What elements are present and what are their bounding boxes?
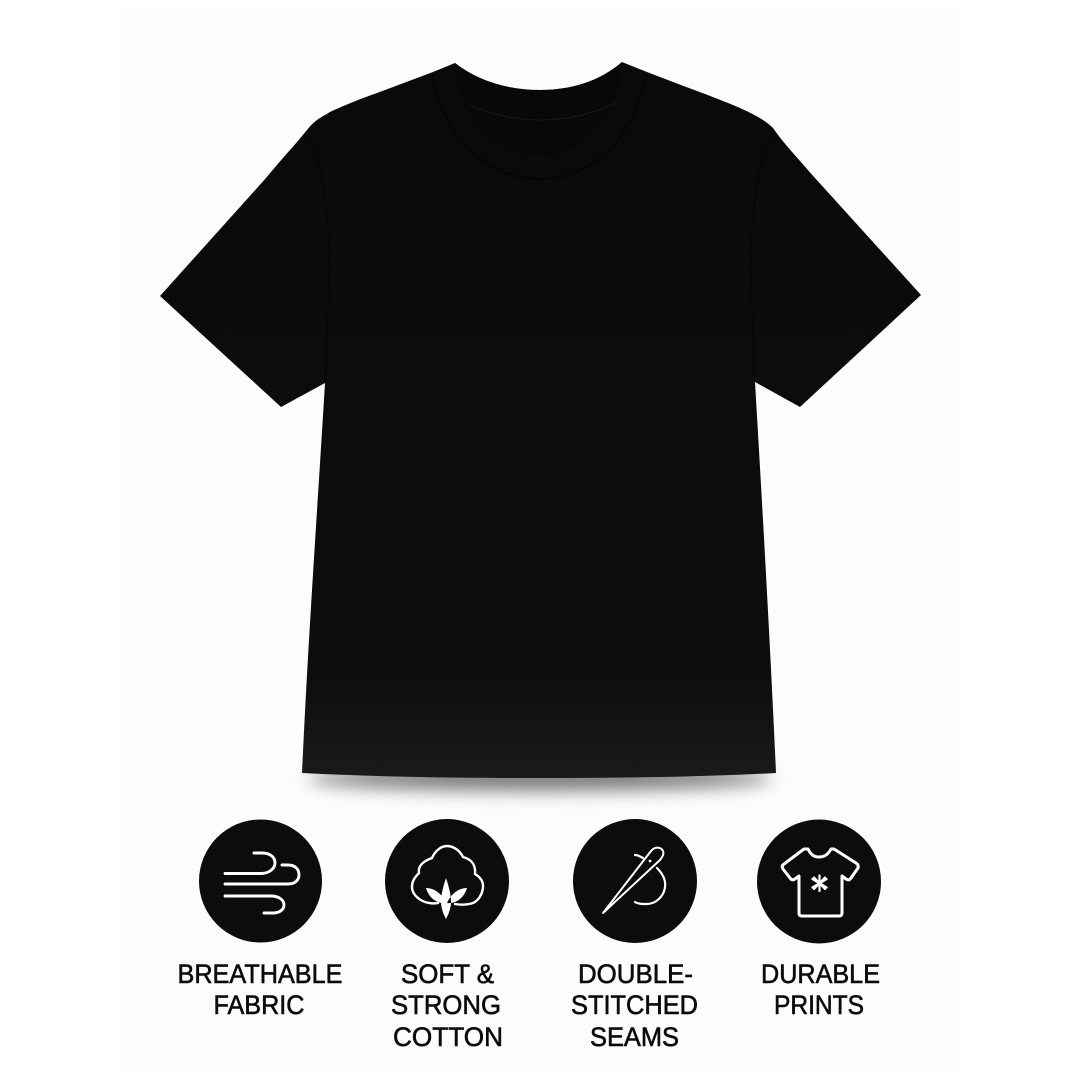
hem shadow — [308, 766, 772, 790]
neck interior — [455, 62, 622, 156]
panel: background — [120, 10, 960, 1070]
icon: wind — [199, 820, 322, 942]
label line 2: STITCHED — [571, 990, 698, 1020]
feature: double-stitched seams — [571, 819, 698, 1052]
collar rib — [433, 73, 645, 179]
label line 3: SEAMS — [590, 1022, 679, 1052]
icon: needle and thread — [573, 819, 697, 943]
label line 2: PRINTS — [774, 990, 864, 1020]
label: DURABLE — [761, 959, 880, 989]
feature: breathable fabric — [178, 820, 342, 1020]
shirt body — [160, 62, 921, 778]
sleeve seams — [307, 132, 773, 383]
label line 3: COTTON — [393, 1022, 503, 1052]
feature: durable prints — [757, 820, 881, 1020]
feature: soft and strong cotton — [385, 819, 509, 1052]
label: BREATHABLE — [178, 959, 342, 989]
label line 2: STRONG — [391, 990, 501, 1020]
label: SOFT & — [401, 959, 494, 989]
illustration: black t-shirt — [160, 62, 921, 790]
label line 2: FABRIC — [214, 990, 304, 1020]
inner neck tape — [470, 103, 615, 120]
label: DOUBLE- — [578, 959, 693, 989]
sleeve cuffs — [178, 284, 902, 398]
icon: t-shirt with print — [757, 820, 881, 944]
icon: cotton — [385, 819, 509, 943]
